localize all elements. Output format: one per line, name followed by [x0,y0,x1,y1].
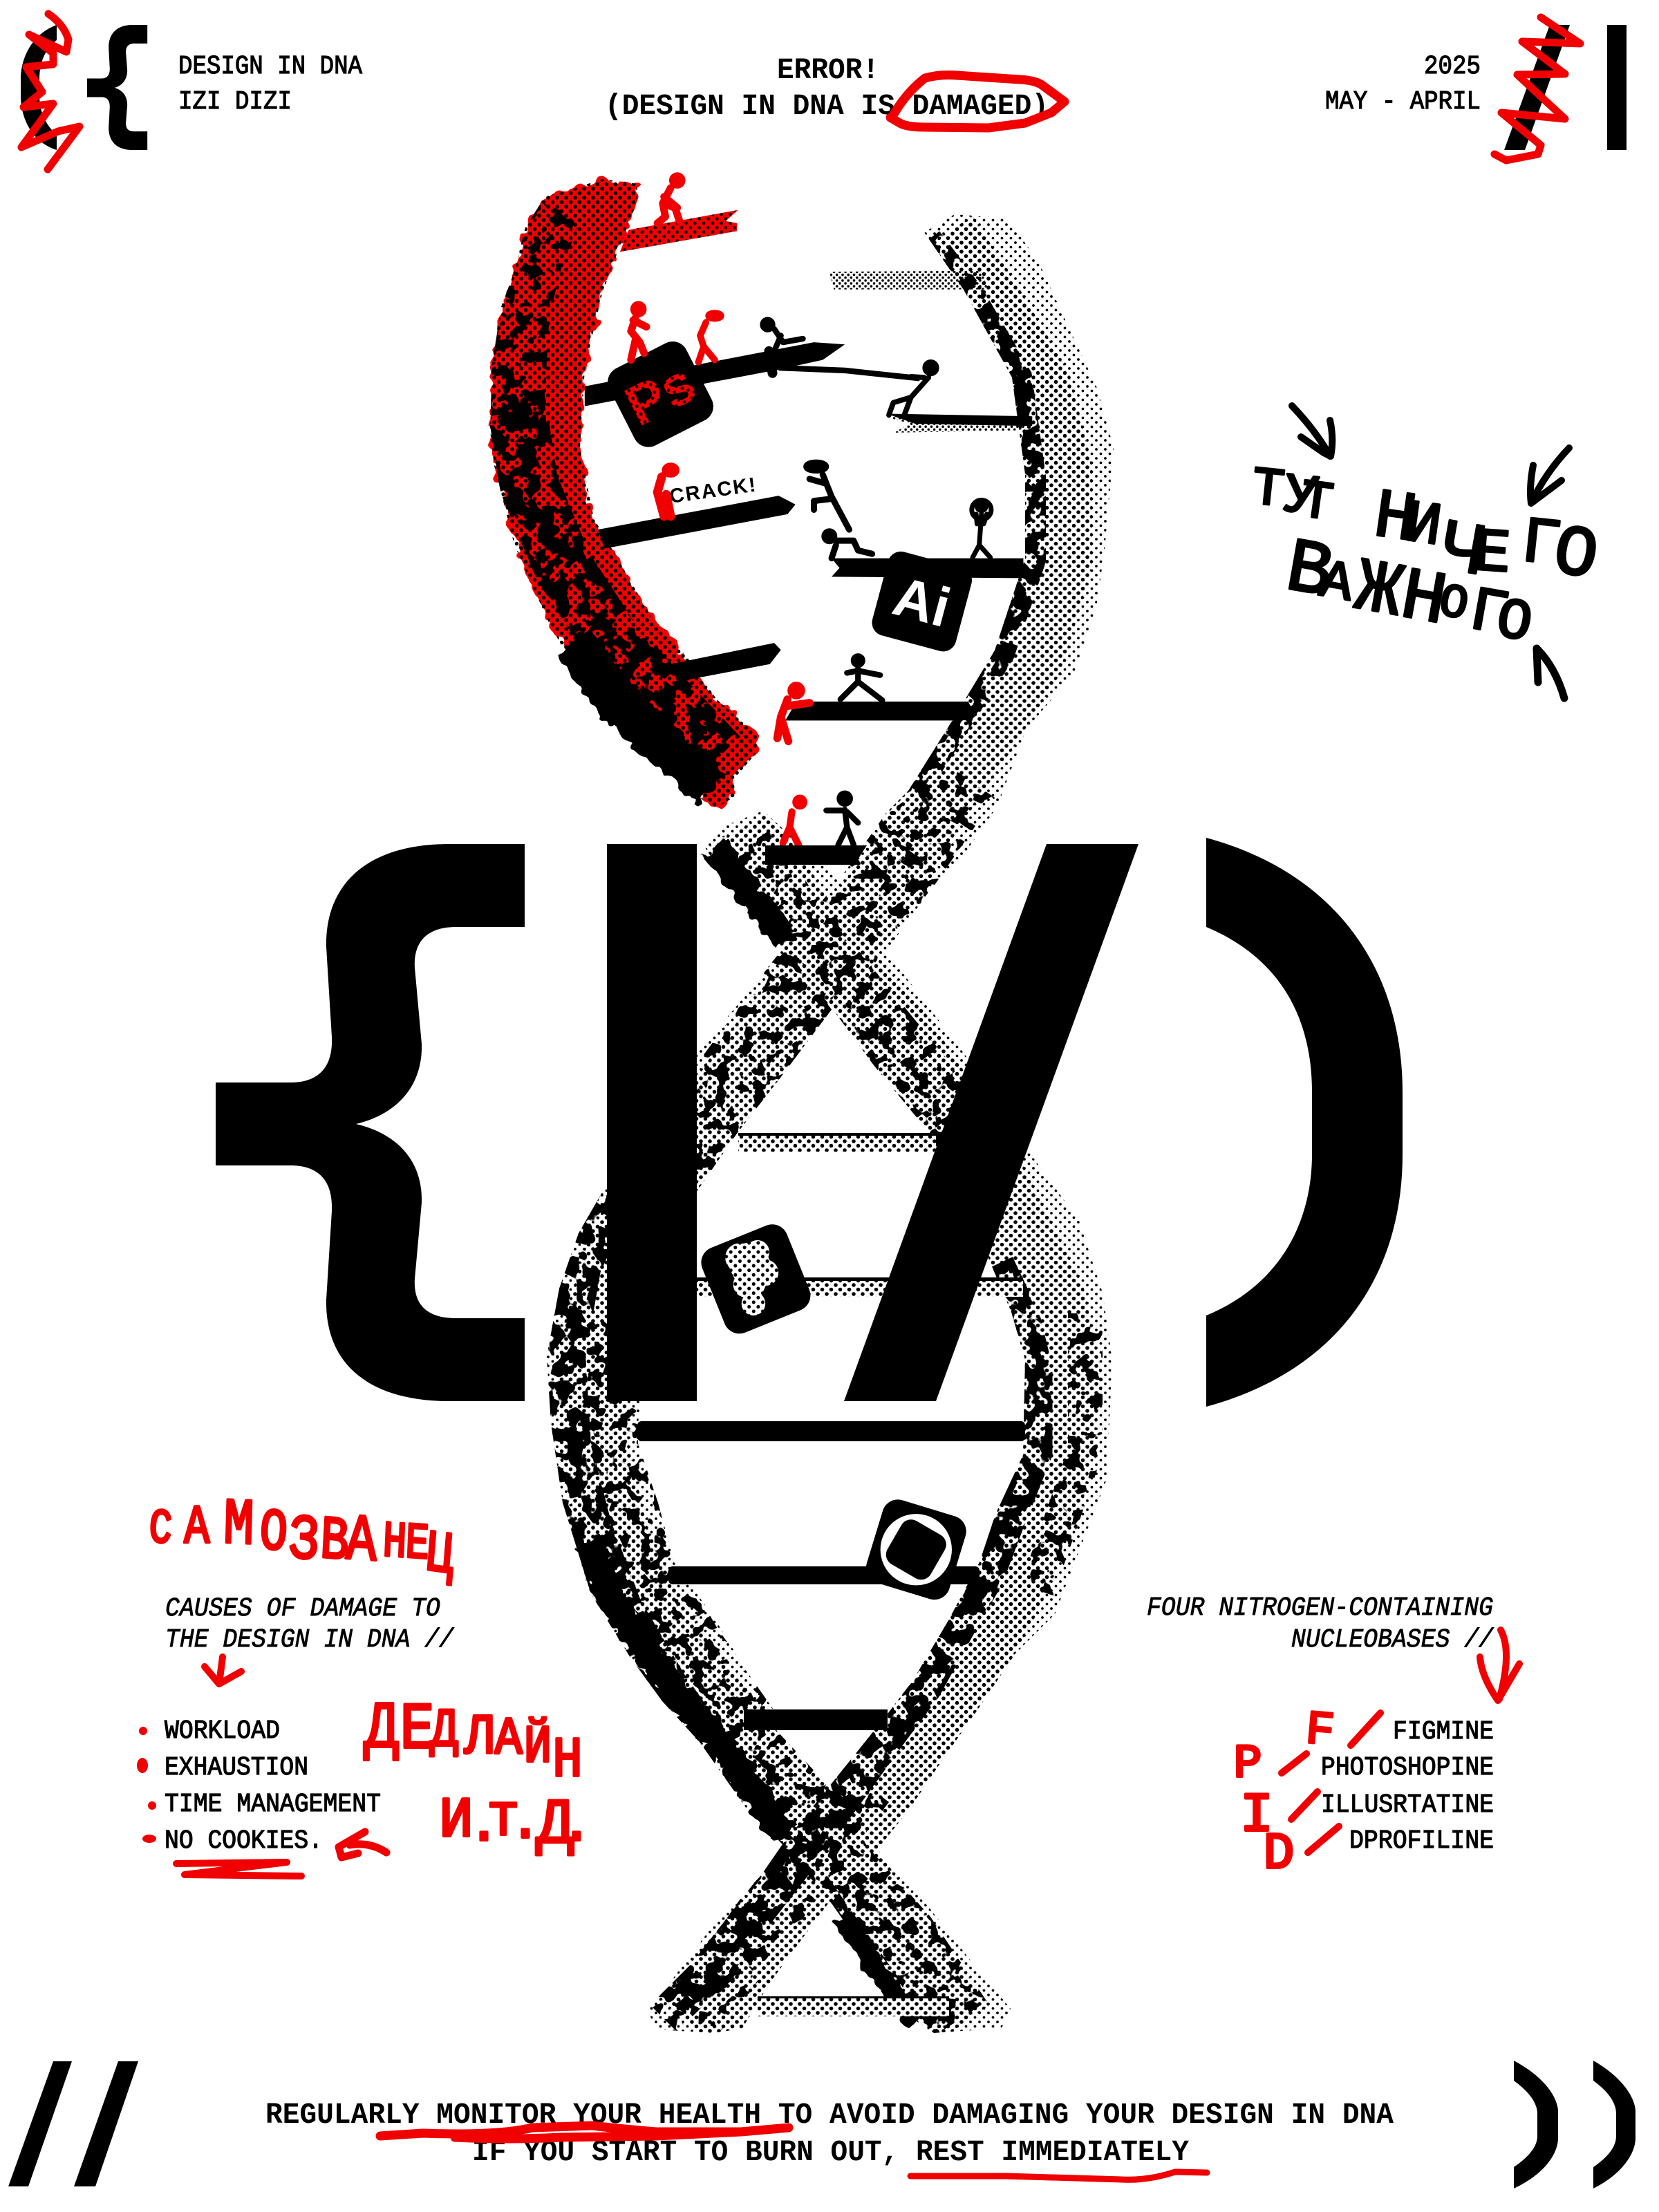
handwriting: letter F: F [1304,1703,1336,1759]
handwriting: etc: И [439,1789,474,1853]
header center title: (DESIGN IN DNA IS DAMAGED) [605,89,1049,123]
panel: nucleobases [1147,1593,1519,1884]
header right: logo marks [1494,17,1627,160]
figure: red man at bottom rung [783,798,804,845]
faint upper right rung [830,271,988,290]
note: nothing important handwriting: Е [1472,519,1512,590]
header left text: IZI DIZI [178,87,292,117]
rung 1: red broken [620,210,738,252]
list: causes: TIME MANAGEMENT [165,1790,381,1819]
handwriting: deadline: Н [552,1730,583,1793]
mark: bar [1607,25,1627,150]
figure: red walker right of Ps [698,313,721,362]
panel: causes of damage [137,1489,593,1876]
rung 8: halftone [738,1133,936,1152]
list: nucleobases: PHOTOSHOPINE [1321,1753,1494,1783]
rung 2: torn black [585,342,845,406]
rung 2: right stub top edge [887,413,1032,426]
strand shadow: solid black, lower red section [574,643,712,788]
footer marks: double parenthesis [1514,2061,1635,2188]
header right text [1325,52,1481,117]
rung 6 [785,702,973,720]
note: nothing important handwriting: Г [1518,507,1564,584]
list: nucleobases [1321,1717,1494,1856]
header right text: MAY - APRIL [1325,87,1481,117]
handwriting: impostor: А [344,1503,379,1580]
figure: lying man [825,532,872,559]
glyph: vertical bar [607,844,697,1401]
arrow: red to no cookies [339,1832,386,1857]
note: nothing important handwriting: А [1315,551,1358,617]
handwriting: deadline: Е [400,1693,435,1768]
note: nothing important handwriting: О [1435,576,1472,633]
glyph: curly brace [216,844,525,1401]
figure: red man pushing rung [778,686,809,741]
rungs and figures, upper section [585,176,1032,845]
glyph: slash [844,844,1138,1401]
handwriting: etc: Т [489,1795,518,1850]
strand shadow: solid black lumpy band, left bulge [589,1541,782,1835]
note: nothing important handwriting: Г [1464,577,1513,653]
header center title [605,53,1049,123]
rung 11 [668,1566,980,1584]
figure: red man by crack [657,467,675,516]
handwriting: deadline: А [495,1709,523,1769]
note: nothing important handwriting: Н [1395,555,1452,645]
note: nothing important handwriting: Т [1248,458,1287,523]
handwriting: impostor: Ц [424,1521,456,1591]
handwriting: impostor: В [319,1506,350,1577]
big logo glyphs [216,838,1403,1407]
icon: Photoshop tile: Ps [616,351,706,438]
list: causes: NO COOKIES. [165,1826,323,1856]
mark: brace [87,25,147,150]
footer advice text [265,2098,1394,2169]
strand: upper right to lower right, halftone [547,214,1114,2033]
scribble: red over slash [1494,17,1580,160]
arrow: black down right [1292,406,1332,456]
heading: causes [165,1594,455,1655]
handwriting: impostor: С [147,1501,174,1558]
icon: Illustrator tile: Ai [887,565,957,639]
handwriting: deadline: Л [464,1707,494,1770]
arrow: black up [1537,648,1564,698]
handwriting: etc: . [509,1792,542,1855]
handwriting: impostor: А [184,1497,210,1559]
handwriting: etc: Д [536,1789,574,1862]
mark: slash [1504,25,1570,150]
arrow: red down [205,1657,241,1684]
note: nothing important handwriting: Ж [1349,546,1408,637]
strand: damaged red section [484,173,767,816]
rung 9: halftone [696,1277,1023,1297]
handwriting: deadline: Д [430,1701,458,1762]
list: causes: WORKLOAD [165,1716,280,1746]
strand shadow: solid black lumpy band, lower leg [842,1918,916,2022]
icon: Figma tile [696,1219,815,1338]
red slashes [1282,1713,1380,1853]
icon: Dprofile tile [862,1496,970,1604]
handwriting: deadline: Д [364,1692,399,1768]
list: causes: EXHAUSTION [165,1753,308,1783]
footer advice text: IF YOU START TO BURN OUT, REST IMMEDIATELY [472,2135,1189,2169]
heading: nucleobases: NUCLEOBASES // [1291,1625,1494,1655]
list bullets: red dots [137,1727,156,1843]
handwriting: letter D: D [1264,1826,1294,1884]
header left text [178,52,362,117]
strand shadow: solid black lumpy band, upper cross [713,847,785,940]
handwriting: impostor: О [258,1499,289,1568]
rung 12 [744,1709,888,1730]
list: nucleobases: FIGMINE [1393,1717,1494,1747]
rung 13: halftone [758,1996,949,2016]
header left text: DESIGN IN DNA [178,52,362,82]
scribble: underline no cookies [176,1862,301,1876]
icon: Illustrator tile [869,549,975,655]
heading: causes: THE DESIGN IN DNA // [165,1625,455,1655]
figure: red walker on Ps [631,305,646,360]
handwriting: etc: . [467,1794,500,1857]
note: nothing important handwriting: О [1548,512,1604,599]
note: nothing important handwriting: Т [1296,471,1336,536]
list: nucleobases: ILLUSRTATINE [1321,1790,1494,1820]
mark: parenthesis [21,25,57,150]
header center title: ERROR! [777,53,879,87]
figure: wide stance man [841,656,882,700]
scribble: underline rest immediately [910,2172,1207,2180]
arrow: red curved down [1480,1630,1519,1700]
rung 5 [671,643,781,682]
heading: causes: CAUSES OF DAMAGE TO [165,1594,440,1624]
note: nothing important handwriting: В [1280,525,1340,619]
note: nothing important handwriting: И [1401,490,1445,562]
arrow: black down left [1530,448,1569,503]
rung 3 [598,496,796,549]
rung 2: right stub [887,418,1032,433]
footer advice text: REGULARLY MONITOR YOUR HEALTH TO AVOID DAMAGING YOUR DESIGN IN DNA [265,2098,1394,2132]
header left: logo marks [21,14,147,169]
list: nucleobases: DPROFILINE [1349,1826,1494,1856]
rung 7 [765,845,867,865]
handwriting: impostor: З [287,1503,321,1579]
handwriting: deadline: Й [524,1716,552,1777]
handwriting: etc: . [560,1794,593,1857]
rope knot [769,351,773,373]
glyph: parenthesis [1206,838,1403,1407]
handwriting: letter I: I [1240,1785,1273,1848]
footer marks: double slash [8,2061,138,2186]
note: nothing important handwriting: О [1492,588,1537,657]
figure: crawling man [762,320,803,351]
handwriting: impostor: Е [404,1515,430,1574]
scribble: red over parenthesis [21,14,79,169]
note: nothing important handwriting: Н [1369,478,1421,561]
handwriting: impostor: М [223,1489,255,1564]
figure: man with hands on head [972,500,991,557]
note: nothing important handwriting: У [1281,465,1321,531]
handwriting: impostor: Н [382,1514,408,1573]
icon: Photoshop tile [602,336,719,452]
DNA helix illustration [484,173,1114,2033]
rope [778,368,920,378]
scribble: underline monitor your health [380,2126,789,2139]
header right text: 2025 [1424,52,1481,82]
note: nothing important handwriting: Ч [1434,507,1492,596]
heading: nucleobases [1147,1593,1494,1655]
figure: falling man [807,462,850,529]
figure: black pointing man [826,794,858,845]
crack label: CRACK! [668,473,758,508]
figure: man pulling rope [889,362,937,415]
list: causes [165,1716,381,1856]
red circle around damaged [890,75,1065,128]
heading: nucleobases: FOUR NITROGEN-CONTAINING [1147,1593,1493,1623]
figure: red walker top [657,176,682,223]
handwriting: letter P: P [1234,1738,1262,1791]
strand: upper left to lower left, halftone [647,811,1112,2033]
note: nothing important handwriting [1248,458,1604,657]
rung 10 [637,1421,1025,1441]
rung 4 [832,559,1023,578]
